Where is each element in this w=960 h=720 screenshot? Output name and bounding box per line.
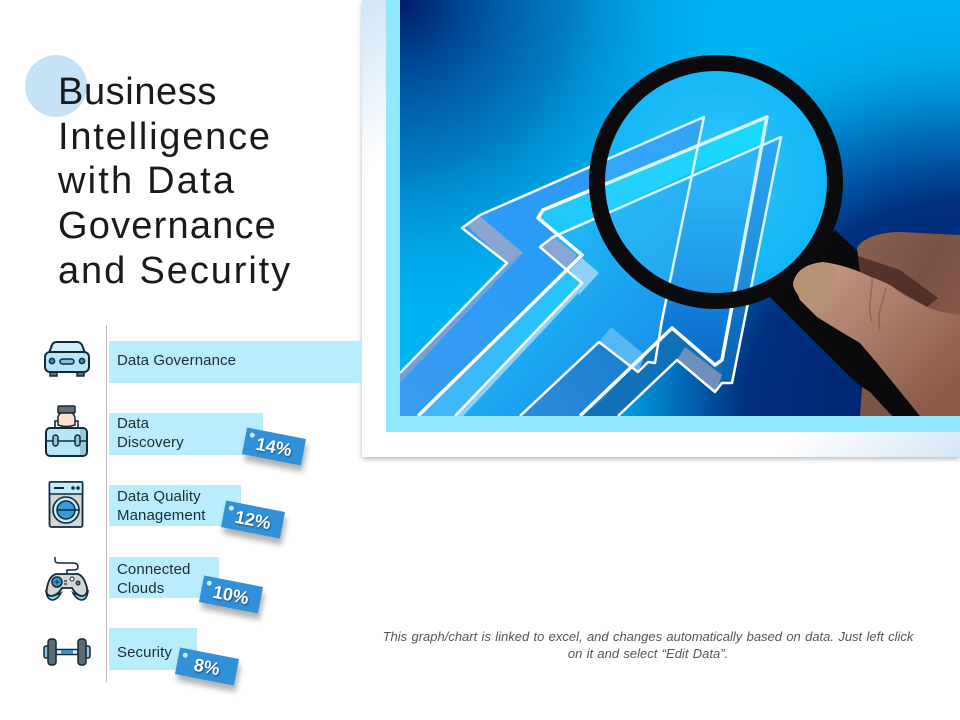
row 1: data governance [44,341,362,383]
tag: 8% [175,648,239,685]
tag: 12% [221,501,285,538]
lower palm [860,387,892,416]
hand [793,232,960,416]
label: connected clouds: Clouds [117,580,164,597]
label: data quality management: Data Quality [117,488,201,505]
thumb [793,262,960,416]
row 4: connected clouds [45,557,268,622]
label: data quality management [117,488,206,524]
thumbnail [793,262,838,305]
tag: 14%: 14% [254,434,293,460]
thumb creases [870,277,886,330]
title: Intelligence [58,116,272,158]
lens glare [604,70,828,294]
picture frame [386,0,960,432]
tag: 14% [242,428,306,465]
back of hand [857,232,960,416]
label: data governance: Data Governance [117,352,236,369]
tag: 8%: 8% [192,655,222,679]
arrow shadows [400,216,722,416]
icon: game controller [45,557,89,601]
icon: dumbbell [43,638,91,666]
title: with Data [58,160,236,202]
tag: 12%: 12% [233,507,272,533]
bar: data governance [109,341,362,383]
footnote: This graph/chart is linked to excel, and changes automatically based on data. Just left click [383,629,913,644]
label: connected clouds: Connected [117,561,190,578]
footnote [383,629,914,661]
picture panel [362,0,960,457]
row 5: security [43,628,244,694]
arrow outlines [400,117,781,416]
icon: briefcase in hand [45,405,88,457]
bar: data quality management [109,485,241,526]
label: data discovery: Discovery [117,434,184,451]
title: Governance [58,205,277,247]
title accent circle [25,55,87,117]
vertical divider [106,325,107,682]
magnifier handle [770,230,920,416]
icon: car [44,341,90,377]
title: and Security [58,250,292,292]
background gradient [400,0,960,416]
title: Business [58,71,217,113]
bar: connected clouds [109,557,219,598]
row 3: data quality management [48,481,290,548]
magnifier ring [597,63,835,301]
tag: 10%: 10% [211,582,250,608]
lens interior [604,70,828,294]
bar: security [109,628,197,670]
arrows [400,117,781,416]
label: data quality management: Management [117,507,206,524]
icon: washing machine [48,481,84,528]
title [58,71,292,292]
shadow under thumb [858,256,938,307]
label: connected clouds [117,561,190,597]
label: data discovery: Data [117,415,149,432]
footnote: on it and select “Edit Data”. [568,646,728,661]
label: security: Security [117,644,172,661]
tag: 10% [199,576,263,613]
bar: data discovery [109,413,263,455]
row 2: data discovery [45,405,310,474]
label: data discovery [117,415,184,451]
photo: magnifying glass over arrows [400,0,960,416]
